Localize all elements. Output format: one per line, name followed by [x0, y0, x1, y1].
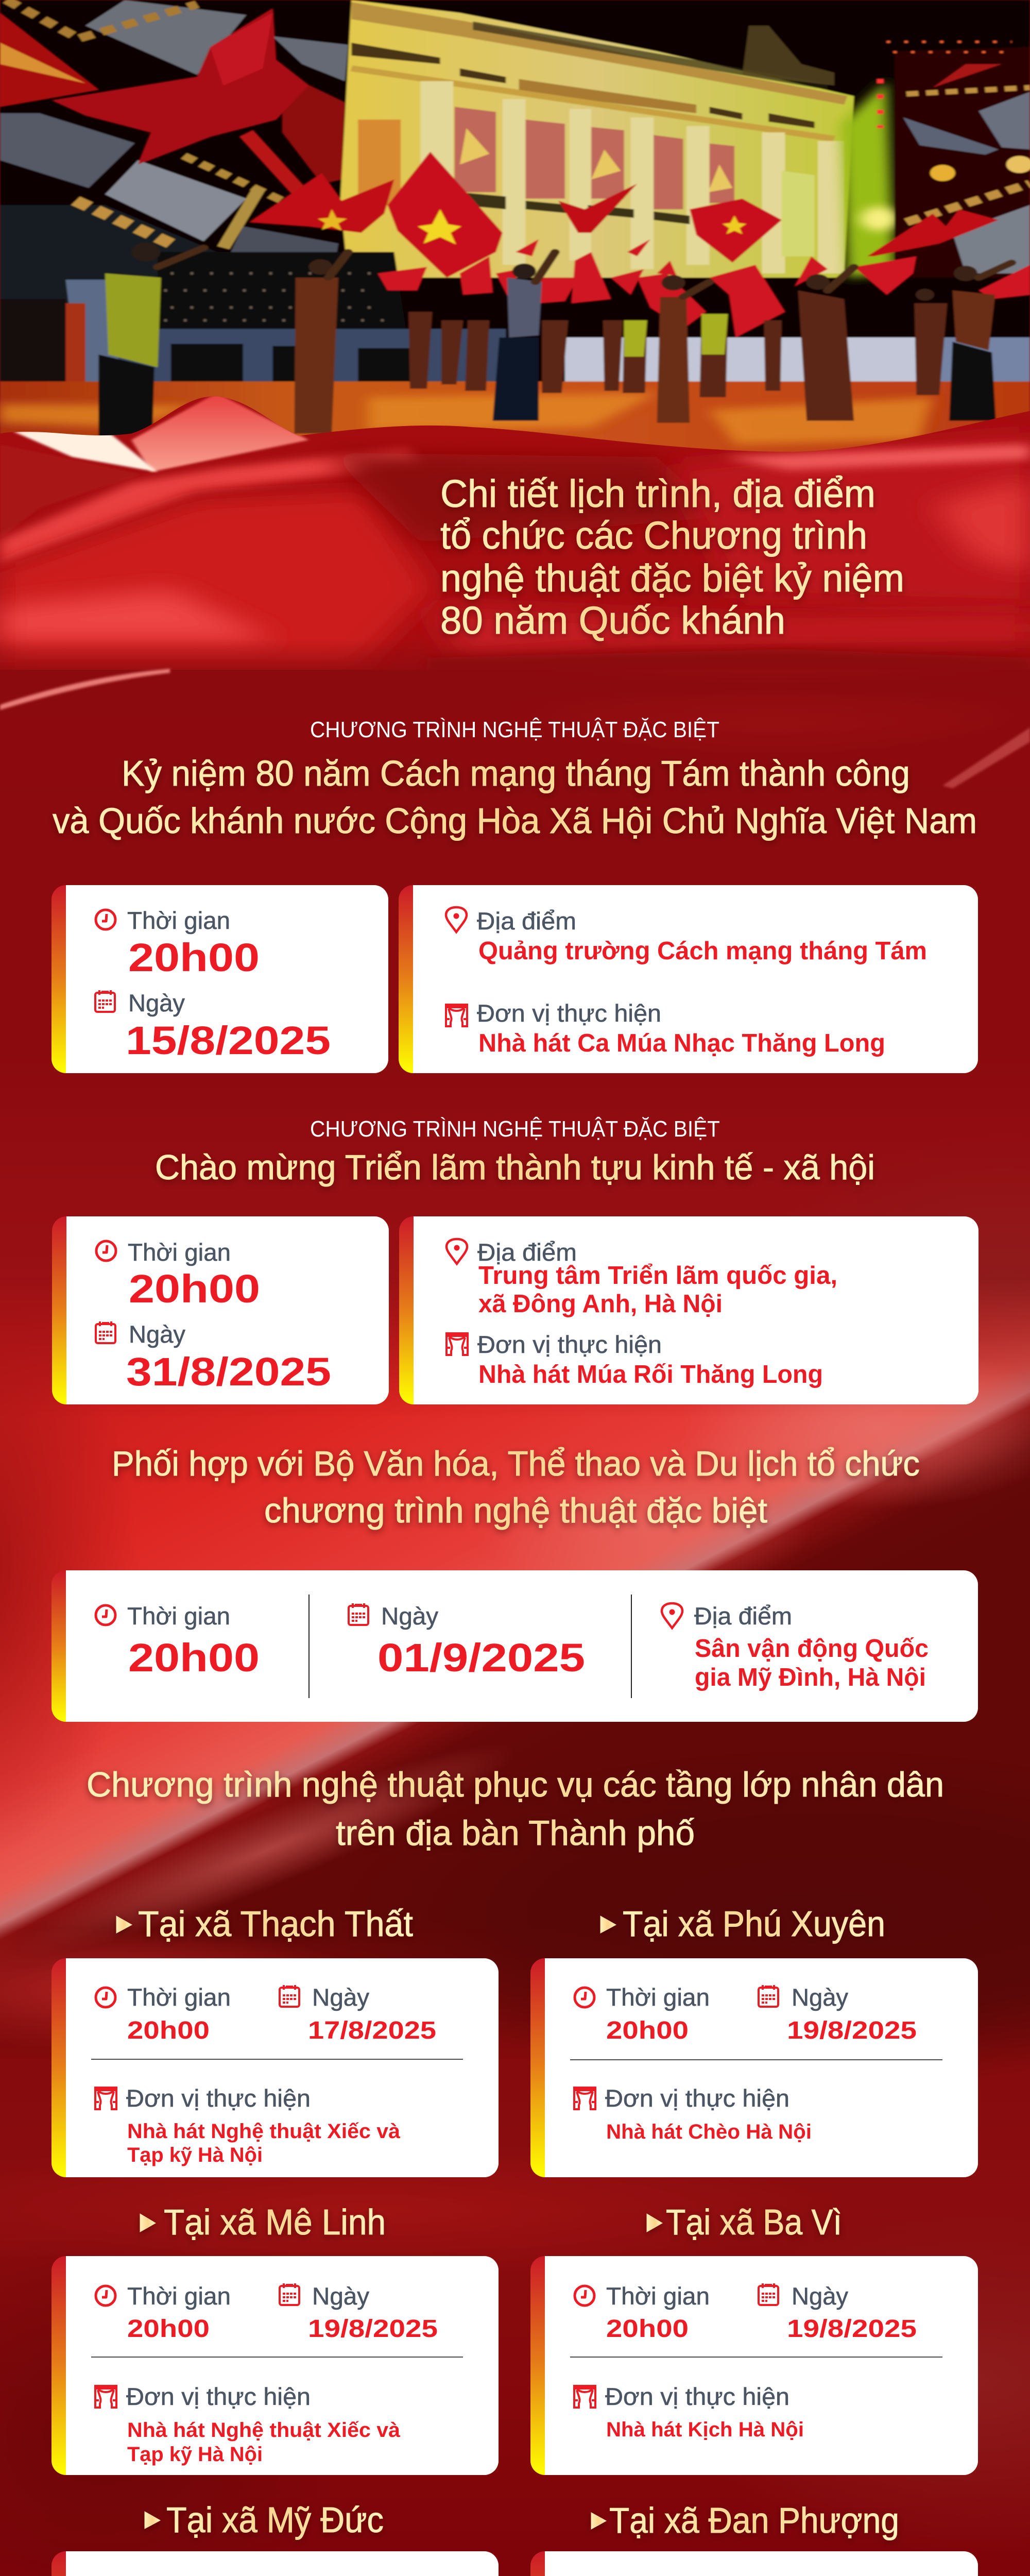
- card: venue and performer, August Revolution Square: [399, 885, 978, 1073]
- card: My Dinh National Stadium, 01/9/2025: 01/9/2025: [377, 1636, 585, 1680]
- large waving flags: [53, 9, 999, 278]
- stage floor: [0, 381, 1030, 453]
- card: Phu Xuyen: Thời gian: [606, 1984, 710, 2011]
- card: Ba Vi: 20h00: [606, 2315, 689, 2343]
- section 4 heading: Chương trình nghệ thuật phục vụ các tầng lớp nhân dân: [87, 1765, 944, 1804]
- page background: silk red: [0, 670, 1030, 2545]
- section 3 heading: chương trình nghệ thuật đặc biệt: [264, 1491, 767, 1530]
- stage front and steps: [0, 280, 1030, 386]
- card: Thach That: 17/8/2025: [308, 2017, 436, 2044]
- section 2 heading: [155, 1116, 875, 1187]
- card: My Dinh National Stadium, 01/9/2025: gia Mỹ Đình, Hà Nội: [695, 1664, 926, 1691]
- card: Ba Vi: Đơn vị thực hiện: [605, 2383, 789, 2410]
- red silk wave: [0, 384, 1030, 684]
- card: Phu Xuyen: Ngày: [792, 1984, 848, 2011]
- card: time and date 15/8/2025: [52, 885, 388, 1073]
- card: Phu Xuyen: Nhà hát Chèo Hà Nội: [606, 2121, 812, 2143]
- main title: 80 năm Quốc khánh: [440, 599, 785, 642]
- small stage flags: [377, 239, 1030, 337]
- card: venue and performer, National Exhibition Centre: Nhà hát Múa Rối Thăng Long: [478, 1361, 823, 1388]
- heading: Thach That: Tại xã Thạch Thất: [138, 1904, 413, 1944]
- card: venue and performer, August Revolution Square: Nhà hát Ca Múa Nhạc Thăng Long: [478, 1029, 885, 1057]
- card: time and date 31/8/2025: Thời gian: [128, 1239, 231, 1266]
- card: Me Linh: Thời gian: [127, 2282, 231, 2310]
- card: Thach That: Đơn vị thực hiện: [126, 2084, 311, 2112]
- left LED screens and film strips: [0, 0, 348, 333]
- card: My Duc: [52, 2551, 499, 2576]
- card: venue and performer, National Exhibition Centre: Đơn vị thực hiện: [477, 1331, 662, 1358]
- orchestra: [158, 252, 407, 337]
- card: time and date 31/8/2025: 20h00: [129, 1267, 260, 1311]
- card: Thach That: Thời gian: [127, 1984, 231, 2011]
- card: My Dinh National Stadium, 01/9/2025: 20h00: [128, 1636, 260, 1680]
- card: Ba Vi: Nhà hát Kịch Hà Nội: [606, 2418, 804, 2441]
- card: Thach That: Nhà hát Nghệ thuật Xiếc và: [127, 2120, 401, 2143]
- heading: Dan Phuong: Tại xã Đan Phượng: [609, 2500, 899, 2540]
- card: venue and performer, National Exhibition Centre: [399, 1216, 978, 1404]
- card: Phu Xuyen: [530, 1958, 978, 2177]
- section 4 heading: [87, 1765, 944, 1853]
- card: Me Linh: Đơn vị thực hiện: [126, 2383, 311, 2410]
- hero photo: stage performance in front of the Opera House: [0, 0, 1030, 684]
- green stage lights: [841, 81, 895, 278]
- heading: Ba Vi: Tại xã Ba Vì: [666, 2202, 842, 2242]
- heading: Phu Xuyen: Tại xã Phú Xuyên: [623, 1904, 885, 1944]
- opera house building: [340, 0, 854, 278]
- card: venue and performer, August Revolution Square: Đơn vị thực hiện: [477, 999, 661, 1027]
- card: venue and performer, August Revolution Square: Địa điểm: [477, 907, 576, 935]
- main title: nghệ thuật đặc biệt kỷ niệm: [440, 556, 904, 600]
- card: Ba Vi: Thời gian: [606, 2282, 710, 2310]
- card: time and date 15/8/2025: 20h00: [128, 936, 260, 980]
- card: time and date 15/8/2025: Thời gian: [127, 907, 230, 934]
- main title: [440, 472, 904, 642]
- card: Thach That: Tạp kỹ Hà Nội: [127, 2144, 263, 2166]
- card: Ba Vi: [530, 2256, 978, 2475]
- card: My Dinh National Stadium, 01/9/2025: [52, 1570, 978, 1722]
- section 3 heading: Phối hợp với Bộ Văn hóa, Thể thao và Du lịch tổ chức: [112, 1444, 920, 1483]
- card: venue and performer, National Exhibition Centre: xã Đông Anh, Hà Nội: [478, 1290, 723, 1318]
- card: time and date 31/8/2025: Ngày: [129, 1320, 185, 1348]
- card: Me Linh: 19/8/2025: [308, 2315, 438, 2343]
- section 1 heading: Kỷ niệm 80 năm Cách mạng tháng Tám thành công: [122, 753, 910, 793]
- section 4 heading: trên địa bàn Thành phố: [336, 1814, 695, 1853]
- card: time and date 31/8/2025: [52, 1216, 389, 1404]
- silk to background transition: [0, 639, 1030, 726]
- section 2 heading: Chào mừng Triển lãm thành tựu kinh tế - xã hội: [155, 1148, 875, 1187]
- section 1 heading: [53, 717, 977, 841]
- card: Me Linh: Tạp kỹ Hà Nội: [127, 2443, 263, 2466]
- card: Me Linh: 20h00: [127, 2315, 210, 2343]
- section 1 heading: và Quốc khánh nước Cộng Hòa Xã Hội Chủ Nghĩa Việt Nam: [53, 801, 977, 841]
- main title: Chi tiết lịch trình, địa điểm: [440, 472, 876, 515]
- section 3 heading: [112, 1444, 920, 1530]
- card: Phu Xuyen: 20h00: [606, 2017, 689, 2044]
- heading: My Duc: Tại xã Mỹ Đức: [166, 2500, 384, 2540]
- card: venue and performer, National Exhibition Centre: Trung tâm Triển lãm quốc gia,: [478, 1262, 837, 1290]
- card: time and date 31/8/2025: 31/8/2025: [126, 1350, 331, 1394]
- card: Me Linh: Nhà hát Nghệ thuật Xiếc và: [127, 2419, 401, 2442]
- card: venue and performer, August Revolution Square: Quảng trường Cách mạng tháng Tám: [478, 937, 927, 965]
- section 2 heading: CHƯƠNG TRÌNH NGHỆ THUẬT ĐẶC BIỆT: [310, 1116, 720, 1142]
- card: Thach That: 20h00: [127, 2017, 210, 2044]
- card: My Dinh National Stadium, 01/9/2025: Địa điểm: [694, 1602, 792, 1630]
- card: Thach That: Ngày: [312, 1984, 369, 2011]
- card: venue and performer, National Exhibition Centre: Địa điểm: [477, 1239, 577, 1266]
- card: Me Linh: Ngày: [312, 2282, 369, 2310]
- card: Phu Xuyen: 19/8/2025: [787, 2017, 917, 2044]
- card: My Dinh National Stadium, 01/9/2025: Sân vận động Quốc: [695, 1635, 929, 1663]
- card: time and date 15/8/2025: Ngày: [128, 989, 185, 1016]
- card: My Dinh National Stadium, 01/9/2025: Thời gian: [127, 1602, 230, 1630]
- card: Me Linh: [52, 2256, 499, 2475]
- card: My Dinh National Stadium, 01/9/2025: Ngày: [381, 1602, 438, 1630]
- section 1 heading: CHƯƠNG TRÌNH NGHỆ THUẬT ĐẶC BIỆT: [310, 717, 719, 742]
- performers: [98, 243, 1011, 436]
- main title: tổ chức các Chương trình: [440, 514, 867, 557]
- heading: Me Linh: Tại xã Mê Linh: [164, 2202, 386, 2242]
- card: Ba Vi: Ngày: [792, 2282, 848, 2310]
- card: time and date 15/8/2025: 15/8/2025: [126, 1019, 331, 1063]
- card: Dan Phuong: [530, 2551, 978, 2576]
- right LED wall: [880, 42, 1030, 278]
- card: Phu Xuyen: Đơn vị thực hiện: [605, 2084, 789, 2112]
- card: Ba Vi: 19/8/2025: [787, 2315, 917, 2343]
- silk transition highlights: [0, 669, 170, 710]
- card: Thach That: [52, 1958, 499, 2177]
